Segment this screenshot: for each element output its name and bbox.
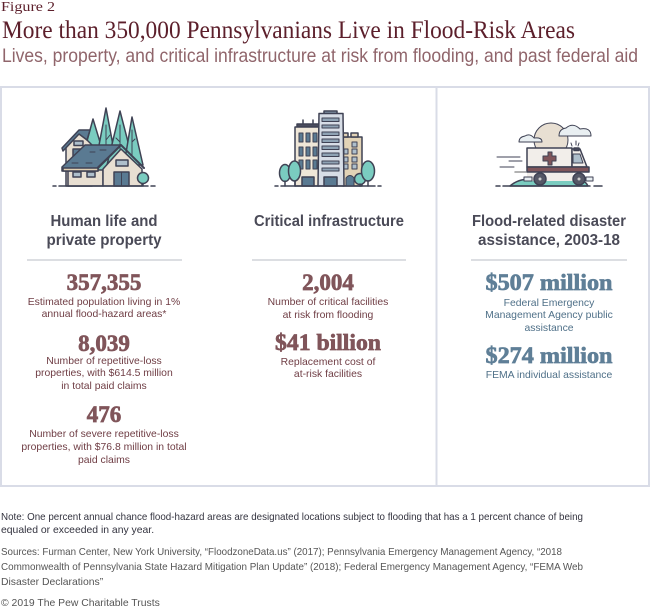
figure label: Figure 2	[1, 0, 55, 15]
copyright: © 2019 The Pew Charitable Trusts	[1, 598, 160, 609]
note: equaled or exceeded in any year.	[1, 525, 154, 536]
heading: Flood-related disaster	[472, 213, 626, 230]
stat description: paid claims	[78, 455, 130, 466]
stat: 357,355: 357,355	[67, 270, 141, 295]
stat description: Number of repetitive-loss	[46, 356, 162, 367]
stat description: FEMA individual assistance	[486, 370, 612, 381]
icon: city buildings	[275, 111, 381, 186]
heading: Human life and	[50, 213, 158, 230]
stat: $507 million: $507 million	[486, 270, 613, 295]
stat description: at-risk facilities	[294, 369, 362, 380]
heading: Critical infrastructure	[254, 213, 404, 230]
sources: Sources: Furman Center, New York University, “FloodzoneData.us” (2017); Pennsylvania Emergency Management Agency, “2018	[1, 547, 562, 558]
panel: human life and private property	[21, 108, 187, 466]
stat description: Management Agency public	[485, 310, 613, 321]
title: More than 350,000 Pennsylvanians Live in Flood-Risk Areas	[2, 17, 575, 44]
stat description: Estimated population living in 1%	[28, 297, 180, 308]
stat description: properties, with $614.5 million	[35, 368, 173, 379]
stat description: properties, with $76.8 million in total	[21, 442, 187, 453]
stat description: Number of critical facilities	[268, 297, 388, 308]
panel frame	[1, 87, 649, 486]
stat description: Replacement cost of	[281, 357, 375, 368]
stat description: in total paid claims	[61, 381, 147, 392]
stat: $41 billion: $41 billion	[275, 330, 381, 355]
panel: flood-related disaster assistance	[471, 123, 627, 381]
stat description: at risk from flooding	[283, 310, 374, 321]
icon: ambulance	[496, 123, 602, 186]
stat: $274 million: $274 million	[486, 343, 613, 368]
stat description: Number of severe repetitive-loss	[29, 429, 179, 440]
stat description: assistance	[524, 323, 574, 334]
heading: private property	[46, 232, 162, 249]
heading: assistance, 2003-18	[478, 232, 620, 249]
stat description: annual flood-hazard areas*	[42, 309, 166, 320]
stat: 8,039: 8,039	[78, 331, 130, 356]
sources: Disaster Declarations”	[1, 577, 104, 588]
icon: house with trees	[53, 108, 155, 186]
sources: Commonwealth of Pennsylvania State Hazard Mitigation Plan Update” (2018); Federal Emergency Management Agency, “FEMA Web	[1, 562, 583, 573]
stat: 2,004: 2,004	[302, 270, 354, 295]
panel: critical infrastructure	[252, 111, 406, 380]
note: Note: One percent annual chance flood-hazard areas are designated locations subject to flooding that has a 1 percent chance of being	[1, 512, 583, 523]
stat: 476: 476	[87, 402, 121, 427]
stat description: Federal Emergency	[504, 298, 595, 309]
